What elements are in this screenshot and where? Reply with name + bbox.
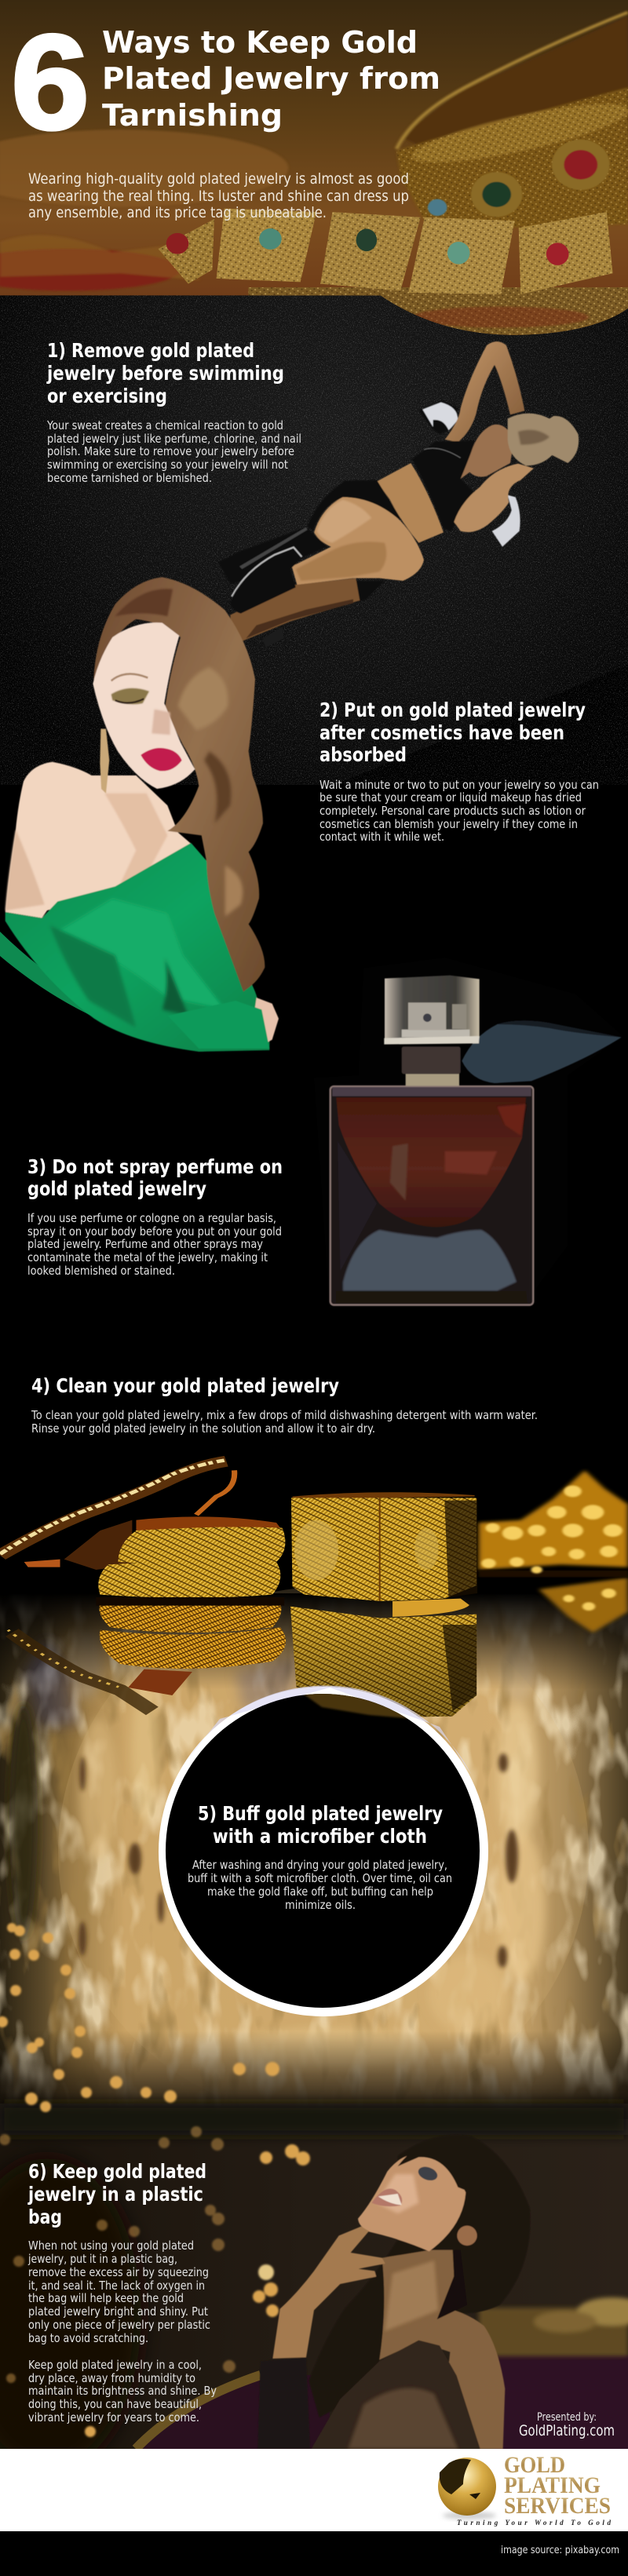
body: step 6: the bag will help keep the gold xyxy=(28,2291,184,2305)
eye makeup xyxy=(111,688,149,704)
bottle glass xyxy=(330,1085,534,1305)
icon: bracelet plates xyxy=(159,209,613,294)
sofa xyxy=(136,2375,330,2449)
body: step 6: only one piece of jewelry per plastic xyxy=(28,2318,210,2332)
bokeh lights xyxy=(0,1923,310,2437)
panel: bottom photo background xyxy=(0,2103,628,2472)
body: step 6: plated jewelry bright and shiny. Put xyxy=(28,2304,208,2319)
heading: step 2: after cosmetics have been xyxy=(319,721,564,744)
body: step 3: looked blemished or stained. xyxy=(27,1264,175,1278)
illustration: woman with wavy hair and green dress xyxy=(5,577,279,1052)
dress xyxy=(312,2341,480,2449)
wide bangle xyxy=(291,1492,477,1601)
logo: Gold Plating Services: SERVICES xyxy=(504,2493,611,2519)
body: step 3: spray it on your body before you put on your gold xyxy=(27,1224,282,1239)
panel: speckled dark floor background xyxy=(0,290,628,785)
body: step 1: become tarnished or blemished. xyxy=(47,471,212,485)
face and neck xyxy=(461,425,514,479)
panel: knitted gold cloth background xyxy=(0,1587,628,2127)
cap xyxy=(385,976,480,1039)
heading: step 3 xyxy=(27,1155,283,1200)
panel: step 3 text xyxy=(27,1155,283,1278)
body: step 1 xyxy=(46,418,301,485)
body: step 6: maintain its brightness and shine. By xyxy=(28,2384,217,2398)
face xyxy=(93,622,195,789)
body: step 2: completely. Personal care products such as lotion or xyxy=(319,804,586,818)
lower leg xyxy=(230,578,360,642)
hair xyxy=(508,414,579,465)
sleeve xyxy=(257,2357,310,2449)
body: step 6: dry place, away from humidity to xyxy=(28,2371,195,2385)
intro text: as wearing the real thing. Its luster and shine can dress up xyxy=(28,188,409,205)
body: step 2 xyxy=(319,778,599,844)
body: step 3: plated jewelry. Perfume and other sprays may xyxy=(27,1237,263,1251)
body: step 2: cosmetics can blemish your jewelry if they come in xyxy=(319,817,578,831)
liquid xyxy=(336,1097,526,1227)
heading: step 2 xyxy=(319,699,586,766)
heading: step 6: jewelry in a plastic xyxy=(27,2183,203,2206)
heading: step 4: 4) Clean your gold plated jewelry xyxy=(31,1374,339,1397)
body: step 2: contact with it while wet. xyxy=(319,830,444,844)
lips xyxy=(371,2189,402,2206)
hand and arm xyxy=(272,2227,385,2359)
waist xyxy=(377,463,444,543)
body: step 5 xyxy=(188,1858,452,1912)
illustration: athlete doing sit-ups xyxy=(218,341,579,648)
panel: header gold bracelet photo xyxy=(0,0,628,337)
earring tassel xyxy=(437,2250,467,2319)
logo: Gold Plating Services: Turning Your World To Gold xyxy=(457,2519,611,2527)
body: step 5: make the gold flake off, but buffing can help xyxy=(207,1885,433,1899)
body: step 5: buff it with a soft microfiber cloth. Over time, oil can xyxy=(188,1871,452,1885)
ribbon xyxy=(462,1020,622,1083)
heading: step 5 xyxy=(198,1802,443,1848)
heading: step 1: 1) Remove gold plated xyxy=(47,339,254,362)
ear xyxy=(457,2226,477,2246)
twisted bangle xyxy=(0,1461,235,1570)
body: step 3 xyxy=(27,1211,282,1278)
creases xyxy=(78,1753,518,1968)
body: step 6: Keep gold plated jewelry in a cool, xyxy=(28,2358,202,2372)
panel: white logo strip xyxy=(0,2449,628,2531)
heading: step 6: bag xyxy=(28,2206,62,2228)
body: step 4: Rinse your gold plated jewelry in the solution and allow it to air dry. xyxy=(31,1421,375,1436)
title: Tarnishing xyxy=(102,98,283,133)
eye shadow xyxy=(416,2164,440,2183)
body: step 3: contaminate the metal of the jewelry, making it xyxy=(27,1250,268,1264)
lower glass reflection xyxy=(343,1230,517,1291)
earring xyxy=(100,729,109,794)
title: Plated Jewelry from xyxy=(102,61,440,96)
body: step 6: vibrant jewelry for years to come. xyxy=(28,2410,199,2425)
body: step 1: polish. Make sure to remove your jewelry before xyxy=(47,444,294,458)
intro text xyxy=(28,170,409,221)
panel: step 4 text xyxy=(31,1374,538,1436)
body: step 6: remove the excess air by squeezing xyxy=(28,2265,209,2279)
intro text: Wearing high-quality gold plated jewelry is almost as good xyxy=(28,170,409,188)
stacked bangles xyxy=(8,1516,286,1711)
icon: gold globe xyxy=(438,2457,496,2519)
bra xyxy=(412,441,475,531)
panel: step 2 text xyxy=(319,699,599,844)
hair xyxy=(93,577,265,991)
heading: step 5: with a microfiber cloth xyxy=(213,1825,427,1848)
logo: Gold Plating Services: PLATING xyxy=(504,2472,601,2498)
neck and shoulder xyxy=(5,762,194,918)
illustration: perfume bottle xyxy=(314,958,623,1308)
dress xyxy=(5,843,269,1052)
body: step 5: After washing and drying your gold plated jewelry, xyxy=(192,1858,447,1872)
heading: step 6: 6) Keep gold plated xyxy=(28,2160,206,2183)
body: step 4 xyxy=(31,1408,538,1436)
forearm xyxy=(454,464,534,532)
body: step 1: Your sweat creates a chemical reaction to gold xyxy=(46,418,283,432)
body: step 5: minimize oils. xyxy=(285,1898,356,1912)
illustration: gold bangles xyxy=(0,1461,628,1717)
heading: step 1: jewelry before swimming xyxy=(46,362,284,385)
neck and collar xyxy=(406,1073,459,1085)
presented by credit xyxy=(519,2411,615,2439)
presented by credit: Presented by: xyxy=(537,2411,597,2424)
logo: Gold Plating Services: GOLD xyxy=(504,2452,565,2478)
panel: step 1 text xyxy=(46,339,301,485)
illustration: laughing woman xyxy=(257,2135,531,2449)
body: step 4: To clean your gold plated jewelry, mix a few drops of mild dishwashing detergent with warm water. xyxy=(31,1408,538,1422)
body: step 6: When not using your gold plated xyxy=(28,2238,194,2253)
body: step 6: it, and seal it. The lack of oxygen in xyxy=(28,2279,205,2293)
neck and shoulder xyxy=(379,2250,505,2449)
heading: step 1: or exercising xyxy=(47,385,167,407)
lips xyxy=(141,748,182,771)
heading: step 6 xyxy=(27,2160,206,2228)
title: Ways to Keep Gold xyxy=(102,25,418,60)
hand xyxy=(254,998,279,1045)
title xyxy=(102,25,440,133)
blurred gold jewelry right xyxy=(479,1470,628,1633)
thigh xyxy=(292,497,424,585)
panel: step 6 text xyxy=(27,2160,217,2425)
shoe xyxy=(230,547,302,614)
hair over forehead xyxy=(398,2137,473,2192)
body: step 6 xyxy=(27,2238,217,2425)
heading: step 5: 5) Buff gold plated jewelry xyxy=(198,1802,443,1825)
face xyxy=(358,2153,466,2251)
heading: step 3: gold plated jewelry xyxy=(27,1177,206,1200)
panel: step 5 circle xyxy=(159,1686,488,2016)
intro text: any ensemble, and its price tag is unbeatable. xyxy=(28,204,327,221)
logo: Gold Plating Services xyxy=(438,2452,611,2527)
heading: step 2: absorbed xyxy=(319,743,407,766)
hair xyxy=(309,2135,531,2417)
heading: step 3: 3) Do not spray perfume on xyxy=(27,1155,283,1178)
body: step 1: plated jewelry just like perfume, chlorine, and nail xyxy=(47,432,301,446)
jewelry visible in circle xyxy=(304,1694,408,1719)
body: step 6: jewelry, put it in a plastic bag, xyxy=(27,2252,177,2266)
shorts xyxy=(308,480,400,531)
icon: bracelet gems xyxy=(428,140,610,217)
arc: green swoosh xyxy=(0,932,200,1050)
body: step 3: If you use perfume or cologne on a regular basis, xyxy=(27,1211,276,1225)
body: step 2: be sure that your cream or liquid makeup has dried xyxy=(319,790,582,805)
arm raised xyxy=(445,341,524,442)
body: step 6: bag to avoid scratching. xyxy=(28,2331,148,2345)
wide bangle reflection xyxy=(290,1599,476,1717)
heading: step 1 xyxy=(46,339,284,407)
body: step 6: doing this, you can have beautiful, xyxy=(28,2397,202,2411)
body: step 1: swimming or exercising so your jewelry will not xyxy=(47,458,288,472)
big numeral 6: 6 xyxy=(11,7,89,158)
